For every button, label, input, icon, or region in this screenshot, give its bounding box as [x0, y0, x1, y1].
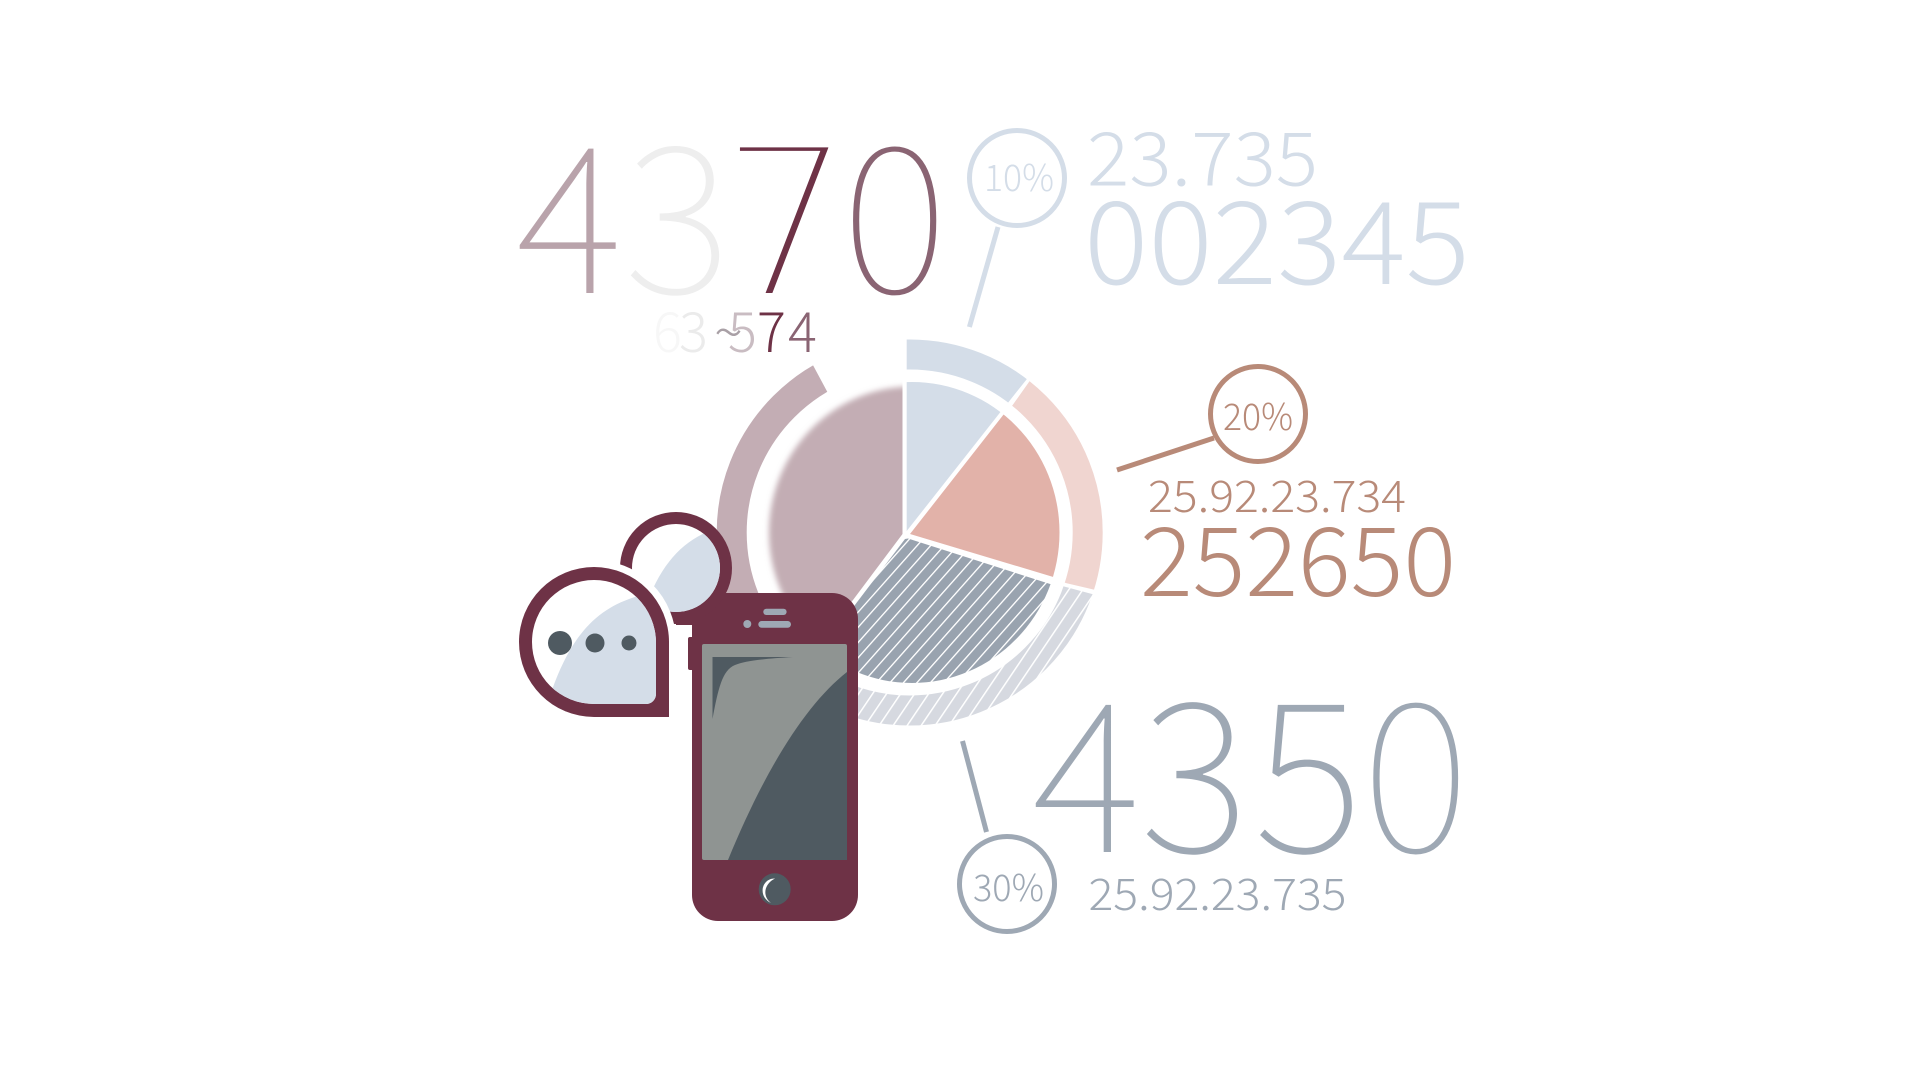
leader line [969, 227, 998, 327]
sub number: 63574: 3 [679, 289, 708, 368]
percentage label: 20% [1223, 387, 1293, 441]
value: 25.92.23.735: 25.92.23.735 [1088, 859, 1346, 923]
callout: 30 percent [960, 741, 1054, 932]
slice: hatched grey [854, 538, 1050, 683]
slice: pink [910, 414, 1060, 577]
circle badge [1210, 366, 1306, 462]
value: 4350: 5 [1254, 611, 1363, 913]
circle badge [960, 836, 1054, 932]
chart: donut outer ring [732, 354, 1088, 710]
percentage label: 10% [984, 148, 1054, 202]
ring segment: 10 percent [906, 340, 1027, 402]
percentage label: 30% [973, 858, 1044, 912]
ring segment: 40 percent [716, 366, 828, 593]
icon: back speech bubble [626, 518, 730, 640]
leader line [962, 741, 986, 832]
value: 4350: 4 [1032, 611, 1141, 913]
chart: pie slices [766, 382, 1060, 683]
value: 23.735: 23.735 [1087, 100, 1318, 208]
value: 4350 [1032, 610, 1470, 914]
slice: mauve [766, 384, 902, 602]
ring segment: 20 percent [1012, 381, 1103, 590]
callout: 20 percent [1117, 366, 1306, 470]
circle badge [970, 130, 1064, 226]
icon: front speech bubble [519, 567, 670, 720]
sub number: 63574: 4 [788, 289, 817, 368]
tilde mark: ~ [714, 289, 743, 368]
sub number: 63574: 5 [728, 289, 757, 368]
value: 4350: 3 [1140, 611, 1249, 913]
leader line [1117, 438, 1214, 470]
heading number: 4370: 7 [714, 96, 854, 352]
heading number: 4370 [516, 56, 948, 354]
value: 4350: 0 [1361, 610, 1470, 914]
heading number: 4370: 3 [624, 56, 731, 353]
sub number: 63574: 6 [653, 289, 682, 368]
ring segment: 30 percent hatched [858, 586, 1092, 726]
icon: smartphone [688, 593, 858, 921]
callout: 10 percent [969, 130, 1064, 327]
sub number: 63574: 7 [757, 289, 786, 368]
heading number: 4370: 0 [841, 56, 948, 354]
value: 252650: 252650 [1140, 485, 1456, 624]
heading number: 4370: 4 [516, 56, 623, 353]
value: 002345: 002345 [1084, 152, 1470, 318]
value: 25.92.23.734: 25.92.23.734 [1148, 461, 1406, 525]
slice: blue [906, 382, 1000, 531]
